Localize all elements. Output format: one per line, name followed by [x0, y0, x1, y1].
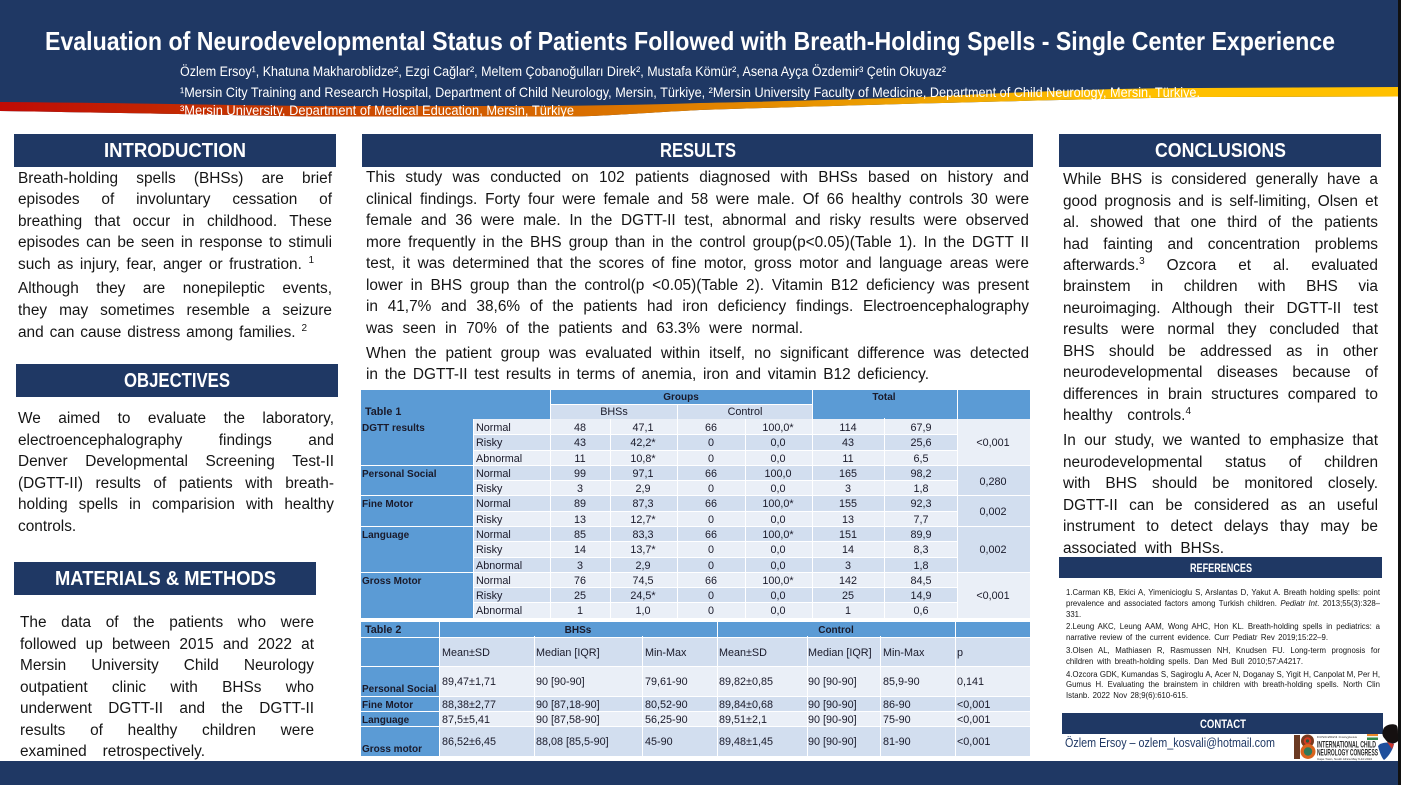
text: and can cause distress among families. 2 — [18, 323, 307, 341]
table 2 header: Median [IQR] — [808, 647, 872, 659]
references list — [1066, 588, 1380, 700]
language rows: 0 — [708, 544, 714, 556]
table 2 header: Table 2 — [365, 624, 401, 636]
fine motor rows: 89 — [574, 498, 586, 510]
table 1 header: Groups — [663, 392, 699, 403]
fine motor row: 90 [90-90] — [808, 699, 857, 711]
language row: 75-90 — [883, 714, 911, 726]
language row: 87,5±5,41 — [442, 714, 490, 726]
logo flag — [1367, 734, 1378, 740]
language rows: 66 — [705, 529, 717, 541]
language row: Language — [362, 715, 410, 726]
gross motor row: 88,08 [85,5-90] — [536, 736, 609, 748]
DGTT results rows: 114 — [839, 422, 857, 434]
fine motor rows: 13 — [574, 514, 586, 526]
personal social rows: Personal Social — [362, 469, 437, 480]
personal social rows: 99 — [574, 468, 586, 480]
table 1 row bands — [361, 419, 1030, 618]
heading: objectives: OBJECTIVES — [124, 370, 230, 392]
language rows: Normal — [476, 529, 511, 541]
fine motor rows — [362, 498, 1007, 526]
personal social row: 90 [90-90] — [536, 676, 585, 688]
table 2 header: p — [957, 647, 963, 659]
table 2 header: Min-Max — [645, 647, 687, 659]
text: holding spells in comparision with healthy — [18, 496, 334, 513]
DGTT results rows: 25,6 — [910, 437, 932, 449]
gross motor rows: 76 — [574, 575, 586, 587]
personal social row: Personal Social — [362, 684, 437, 695]
gross motor row: <0,001 — [957, 736, 990, 748]
language row: 89,51±2,1 — [719, 714, 767, 726]
personal social rows: 3 — [845, 483, 851, 495]
gross motor row: 89,48±1,45 — [719, 736, 773, 748]
language row: 90 [90-90] — [808, 714, 857, 726]
personal social rows: 66 — [705, 468, 717, 480]
fine motor row: 90 [87,18-90] — [536, 699, 600, 711]
heading: conclusions — [1059, 134, 1381, 167]
language rows: 85 — [574, 529, 586, 541]
personal social rows: 2,9 — [635, 483, 651, 495]
fine motor rows: 100,0* — [762, 498, 794, 510]
table 2 header: Median [IQR] — [536, 647, 600, 659]
contact details: Özlem Ersoy – ozlem_kosvali@hotmail.com — [1065, 736, 1275, 750]
language row: 56,25-90 — [645, 714, 688, 726]
gross motor rows: 0,6 — [913, 605, 929, 617]
text: followed up between 2015 and 2022 at — [20, 636, 314, 653]
text: in the DGTT-II test results in terms of anemia, iron and vitamin B12 deficiency. — [366, 366, 929, 383]
fine motor rows: Normal — [476, 498, 511, 510]
language rows: 89,9 — [910, 529, 932, 541]
table 2 background — [361, 622, 1030, 756]
DGTT results rows — [362, 422, 1010, 465]
gross motor rows: 74,5 — [632, 575, 654, 587]
fine motor row: 86-90 — [883, 699, 911, 711]
table 1 header: BHSs — [600, 406, 628, 418]
table 2 header: Control — [818, 625, 854, 636]
text: neurodevelopmental diseases because of — [1063, 364, 1378, 381]
gross motor row: Gross motor — [362, 744, 422, 755]
affiliations line 2: ³Mersin University, Department of Medical Education, Mersin, Türkiye — [180, 102, 574, 118]
language rows — [362, 529, 1007, 572]
text: 4.Ozcora GDK, Kumandas S, Sagiroglu A, Acer N, Doganay S, Yigit H, Canpolat M, Per H, — [1066, 670, 1380, 679]
logo numeral — [1294, 735, 1300, 759]
gross motor rows: 1 — [845, 605, 851, 617]
gross motor rows: 25 — [574, 590, 586, 602]
text: with BHS should be monitored closely. — [1063, 475, 1378, 492]
text: Breath-holding spells (BHSs) are brief — [18, 170, 332, 187]
text: neuroimaging. Although their DGTT-II test — [1063, 300, 1378, 317]
gross motor rows: 100,0* — [762, 575, 794, 587]
gross motor rows: 0,0 — [770, 590, 786, 602]
DGTT results rows: 0 — [708, 453, 714, 465]
text: Istanb. 2022 Nov 28;9(6):610-615. — [1066, 691, 1188, 700]
fine motor rows: 92,3 — [910, 498, 932, 510]
table 1 header — [361, 390, 1030, 420]
language rows: 0,002 — [979, 544, 1007, 556]
language rows: 3 — [577, 560, 583, 572]
gross motor rows: 142 — [839, 575, 857, 587]
language row: <0,001 — [957, 714, 990, 726]
fine motor rows: 66 — [705, 498, 717, 510]
logo name: ICNC2024 Congress — [1317, 735, 1358, 739]
personal social rows: 97,1 — [632, 468, 654, 480]
text: controls. — [18, 518, 76, 535]
gross motor rows: 84,5 — [910, 575, 932, 587]
header banner — [0, 0, 1398, 118]
text: episodes can be seen in response to stimuli — [18, 234, 332, 251]
fine motor row: 88,38±2,77 — [442, 699, 496, 711]
language rows: Language — [362, 530, 410, 541]
personal social rows: 100,0 — [764, 468, 792, 480]
text: good prognosis and is self-limiting, Olsen et — [1063, 193, 1378, 210]
fine motor row: Fine Motor — [362, 700, 413, 711]
text: had fainting and concentration problems — [1063, 236, 1378, 253]
language rows: 151 — [839, 529, 857, 541]
gross motor rows — [362, 575, 1010, 617]
personal social row: 0,141 — [957, 676, 984, 688]
text: electroencephalography findings and — [18, 432, 334, 449]
fine motor row — [362, 699, 990, 711]
logo rings — [1300, 734, 1316, 759]
DGTT results rows: 0,0 — [770, 453, 786, 465]
fine motor rows: 7,7 — [913, 514, 929, 526]
gross motor row: 81-90 — [883, 736, 911, 748]
gross motor rows: 0,0 — [770, 605, 786, 617]
gross motor row: 90 [90-90] — [808, 736, 857, 748]
heading: objectives — [16, 364, 338, 397]
language row: 90 [87,58-90] — [536, 714, 600, 726]
footer bar — [0, 761, 1398, 785]
language rows: 0 — [708, 560, 714, 572]
DGTT results rows: Risky — [476, 437, 503, 449]
text: 2.Leung AKC, Leung AAM, Wong AHC, Hon KL. Breath-holding spells in pediatrics: a — [1066, 622, 1380, 631]
text: underwent DGTT-II and the DGTT-II — [20, 700, 314, 717]
DGTT results rows: Normal — [476, 422, 511, 434]
DGTT results rows: Abnormal — [476, 453, 522, 465]
text: Denver Developmental Screening Test-II — [18, 453, 334, 470]
DGTT results rows: 47,1 — [632, 422, 654, 434]
text: results of healthy children were — [20, 722, 314, 739]
personal social rows: 98,2 — [910, 468, 932, 480]
language rows: 0,0 — [770, 560, 786, 572]
heading: references: REFERENCES — [1190, 563, 1252, 575]
heading: introduction: INTRODUCTION — [104, 140, 246, 162]
reference 1 — [1066, 588, 1380, 619]
fine motor rows: Risky — [476, 514, 503, 526]
logo name — [1317, 735, 1378, 761]
personal social rows: 0,280 — [979, 476, 1007, 488]
DGTT results rows: 6,5 — [913, 453, 929, 465]
DGTT results rows: <0,001 — [976, 437, 1010, 449]
fine motor row: 89,84±0,68 — [719, 699, 773, 711]
fine motor rows: 0,002 — [979, 506, 1007, 518]
DGTT results rows: 43 — [574, 437, 586, 449]
text: afterwards.3 Ozcora et al. evaluated — [1063, 256, 1378, 274]
language rows: 1,8 — [913, 560, 929, 572]
text: prevalence and associated factors among Turkish children. Pediatr Int. 2013;55(3):328– — [1066, 599, 1380, 608]
DGTT results rows: 100,0* — [762, 422, 794, 434]
personal social row: 79,61-90 — [645, 676, 688, 688]
DGTT results rows: 10,8* — [630, 453, 656, 465]
personal social row — [362, 676, 984, 695]
text: BHS should be addressed as in other — [1063, 343, 1378, 360]
DGTT results rows: 11 — [842, 453, 854, 465]
text: We aimed to evaluate the laboratory, — [18, 410, 334, 427]
fine motor rows: 13 — [842, 514, 854, 526]
text: al. showed that one third of the patients — [1063, 214, 1378, 231]
congress logo — [1280, 724, 1398, 761]
text: differences in brain structures compared to — [1063, 386, 1378, 403]
text: breathing that occur in childhood. These — [18, 213, 332, 230]
text: brainstem in children with BHS via — [1063, 278, 1378, 295]
text: examined retrospectively. — [20, 743, 205, 760]
gross motor rows: 24,5* — [630, 590, 656, 602]
language rows: 0,0 — [770, 544, 786, 556]
DGTT results rows: 11 — [574, 453, 586, 465]
text: The data of the patients who were — [20, 614, 314, 631]
heading: introduction — [14, 134, 336, 167]
objectives text — [18, 410, 334, 535]
table 2 — [361, 622, 1030, 756]
gross motor rows: Normal — [476, 575, 511, 587]
table 1 — [361, 390, 1030, 618]
text: This study was conducted on 102 patients diagnosed with BHSs based on history and — [366, 169, 1029, 186]
DGTT results rows: 48 — [574, 422, 586, 434]
gross motor rows: 0 — [708, 590, 714, 602]
personal social row: 89,82±0,85 — [719, 676, 773, 688]
gross motor row: 45-90 — [645, 736, 673, 748]
fine motor rows: 87,3 — [632, 498, 654, 510]
heading: references — [1059, 557, 1382, 578]
heading: conclusions: CONCLUSIONS — [1155, 140, 1286, 162]
language rows: 13,7* — [630, 544, 656, 556]
heading: materials and methods: MATERIALS & METHODS — [55, 568, 276, 590]
DGTT results rows: 43 — [842, 437, 854, 449]
table 2 header: BHSs — [565, 625, 592, 636]
logo figure — [1378, 724, 1398, 760]
text: lower in BHS group than the control(p <0.05)(Table 2). Vitamin B12 deficiency was present — [366, 277, 1029, 294]
gross motor row — [362, 736, 990, 755]
personal social row: 90 [90-90] — [808, 676, 857, 688]
language rows: 83,3 — [632, 529, 654, 541]
gross motor rows: 1,0 — [635, 605, 651, 617]
gross motor rows: 66 — [705, 575, 717, 587]
table 1 header: Control — [728, 406, 762, 418]
personal social rows: 165 — [839, 468, 857, 480]
authors: Özlem Ersoy¹, Khatuna Makharoblidze², Ezgi Cağlar², Meltem Çobanoğulları Direk², Mustafa Kömür², Asena Ayça Özdemir³ Çetin Okuyaz² — [180, 64, 946, 79]
language rows: 14 — [574, 544, 586, 556]
heading: contact: CONTACT — [1200, 719, 1246, 731]
personal social rows — [362, 468, 1007, 495]
DGTT results rows: 0 — [708, 437, 714, 449]
personal social rows: Normal — [476, 468, 511, 480]
gross motor rows: Risky — [476, 590, 503, 602]
text: clinical findings. Forty four were female and 58 were male. Of 66 healthy controls 30 were — [366, 191, 1029, 208]
personal social rows: 0,0 — [770, 483, 786, 495]
personal social rows: 0 — [708, 483, 714, 495]
text: Gumus H. Evaluating the brainstem in children with breath-holding spells. North Clin — [1066, 680, 1380, 689]
materials and methods text — [20, 614, 314, 760]
text: neurodevelopmental status of children — [1063, 454, 1378, 471]
gross motor row: 86,52±6,45 — [442, 736, 496, 748]
text: healthy controls.4 — [1063, 406, 1191, 424]
text: associated with BHSs. — [1063, 540, 1224, 557]
text: While BHS is considered generally have a — [1063, 171, 1378, 188]
text: they may sometimes resemble a seizure — [18, 302, 332, 319]
text: narrative review of the current evidence. Curr Pediatr Rev 2019;15:22–9. — [1066, 633, 1328, 642]
text: more frequently in the BHS group than in the control group(p<0.05)(Table 1). In the DGTT II — [366, 234, 1029, 251]
DGTT results rows: DGTT results — [362, 423, 425, 434]
heading: results: RESULTS — [660, 140, 736, 162]
table 1 header: Table 1 — [365, 406, 401, 418]
fine motor rows: 0 — [708, 514, 714, 526]
text: female and 36 were male. In the DGTT-II test, abnormal and risky results were observed — [366, 212, 1029, 229]
logo name: Cape Town, South Africa May 6-10 2024 — [1317, 757, 1372, 761]
heading: materials and methods — [14, 562, 316, 595]
fine motor rows: 0,0 — [770, 514, 786, 526]
table 2 header — [365, 624, 963, 659]
DGTT results rows: 42,2* — [630, 437, 656, 449]
table 1 header: Total — [872, 392, 896, 403]
personal social row: 85,9-90 — [883, 676, 920, 688]
table 2 header: Mean±SD — [442, 647, 490, 659]
language rows: 8,3 — [913, 544, 929, 556]
text: When the patient group was evaluated within itself, no significant difference was detected — [366, 345, 1029, 362]
text: children with breath-holding spells. Dan Med Bull 2010;57:A4217. — [1066, 657, 1303, 666]
personal social row: 89,47±1,71 — [442, 676, 496, 688]
personal social rows: 1,8 — [913, 483, 929, 495]
introduction text — [18, 170, 332, 341]
text: test, it was determined that the scores of fine motor, gross motor and language areas were — [366, 255, 1029, 272]
text: such as injury, fear, anger or frustration. 1 — [18, 255, 314, 273]
gross motor rows: Gross Motor — [362, 576, 422, 587]
fine motor rows: 12,7* — [630, 514, 656, 526]
fine motor rows: Fine Motor — [362, 499, 413, 510]
gross motor rows: <0,001 — [976, 590, 1010, 602]
reference 3 — [1066, 646, 1380, 666]
language rows: 100,0* — [762, 529, 794, 541]
DGTT results rows: 0,0 — [770, 437, 786, 449]
gross motor rows: 0 — [708, 605, 714, 617]
fine motor rows: 155 — [839, 498, 857, 510]
text: 1.Carman KB, Ekici A, Yimenicioglu S, Arslantas D, Yakut A. Breath holding spells: point — [1066, 588, 1380, 597]
text: 3.Olsen AL, Mathiasen R, Rasmussen NH, Knudsen FU. Long-term prognosis for — [1066, 646, 1380, 655]
gross motor rows: 14,9 — [910, 590, 932, 602]
conclusions text — [1063, 171, 1378, 557]
text: In our study, we wanted to emphasize that — [1063, 432, 1378, 449]
language rows: Abnormal — [476, 560, 522, 572]
language rows: 14 — [842, 544, 854, 556]
heading: contact — [1062, 713, 1383, 734]
text: DGTT-II can be considered as an useful — [1063, 497, 1378, 514]
DGTT results rows: 67,9 — [910, 422, 932, 434]
table 2 header: Min-Max — [883, 647, 925, 659]
fine motor row: <0,001 — [957, 699, 990, 711]
text: results were normal they concluded that — [1063, 321, 1378, 338]
language rows: 2,9 — [635, 560, 651, 572]
affiliations line 1: ¹Mersin City Training and Research Hospital, Department of Child Neurology, Mersin, Türkiye, ²Mersin University Faculty of Medicine, Department of Child Neurology, Mersin, Türkiye. — [180, 84, 1200, 100]
text: 331. — [1066, 610, 1081, 619]
heading: results — [362, 134, 1033, 167]
language rows: Risky — [476, 544, 503, 556]
text: instrument to detect delays thay may be — [1063, 518, 1378, 535]
fine motor row: 80,52-90 — [645, 699, 688, 711]
text: outpatient clinic with BHSs who — [20, 679, 314, 696]
text: Although they are nonepileptic events, — [18, 280, 332, 297]
reference 2 — [1066, 622, 1380, 642]
gross motor rows: Abnormal — [476, 605, 522, 617]
right edge strip — [1398, 0, 1401, 785]
personal social rows: 3 — [577, 483, 583, 495]
results text — [366, 169, 1029, 383]
table 2 header: Mean±SD — [719, 647, 767, 659]
personal social rows: Risky — [476, 483, 503, 495]
language rows: 3 — [845, 560, 851, 572]
text: (DGTT-II) results of patients with breath- — [18, 475, 334, 492]
gross motor rows: 1 — [577, 605, 583, 617]
text: Mersin University Child Neurology — [20, 657, 314, 674]
DGTT results rows: 66 — [705, 422, 717, 434]
text: episodes of involuntary cessation of — [18, 191, 332, 208]
text: in 41,7% and 38,6% of the patients had iron deficiency findings. Electroencephalography — [366, 298, 1029, 315]
text: was seen in 70% of the patients and 63.3% were normal. — [366, 320, 803, 337]
reference 4 — [1066, 670, 1380, 700]
header swoosh — [0, 87, 1398, 116]
language row — [362, 714, 990, 726]
gross motor rows: 25 — [842, 590, 854, 602]
